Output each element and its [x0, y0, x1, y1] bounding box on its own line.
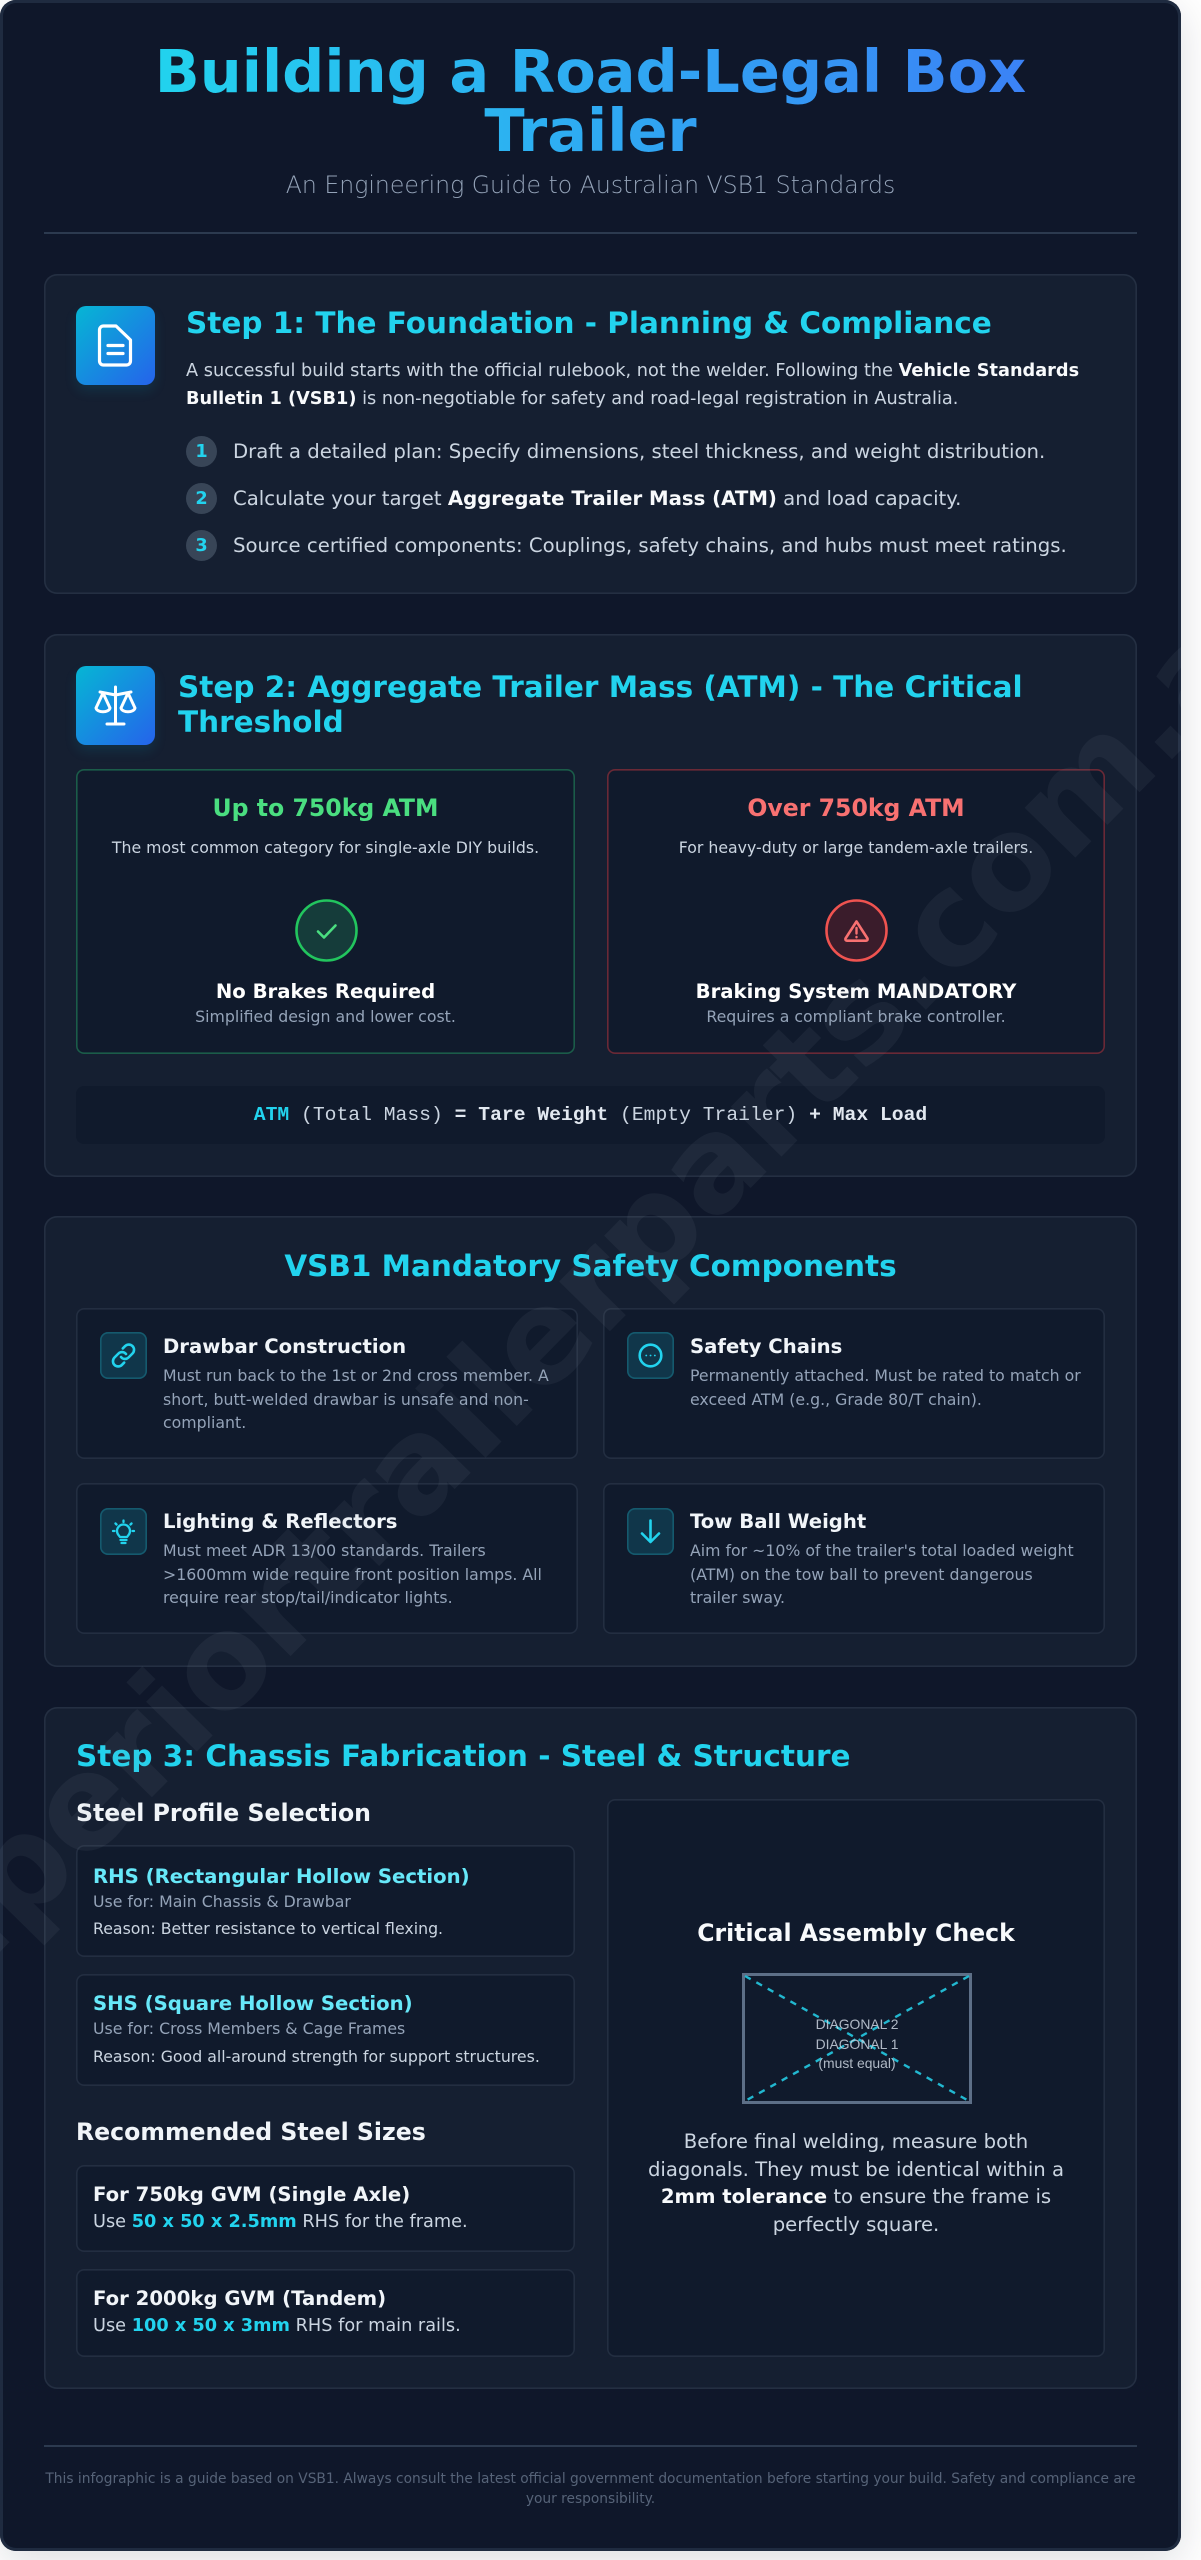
profile name: RHS (Rectangular Hollow Section) — [93, 1865, 470, 1888]
check text: Before final welding, measure both — [684, 2130, 1028, 2153]
heading: step 1: Step 1: The Foundation - Planning & Compliance — [186, 306, 992, 340]
profile use: Use for: Main Chassis & Drawbar — [93, 1892, 351, 1911]
check text: perfectly square. — [773, 2212, 939, 2236]
item 2: 2 — [195, 489, 208, 509]
footer note: This infographic is a guide based on VSB1. Always consult the latest official government documentation before starting your build. Safety and compliance are — [45, 2471, 1136, 2487]
card heading: Up to 750kg ATM — [212, 794, 438, 822]
card: SHS — [76, 1974, 575, 2086]
card: lighting and reflectors — [76, 1483, 578, 1634]
result note: Requires a compliant brake controller. — [706, 1007, 1006, 1026]
card: tow ball weight — [603, 1483, 1105, 1634]
card: safety chains — [603, 1308, 1105, 1459]
icon: chain link — [100, 1332, 147, 1379]
card text: require rear stop/tail/indicator lights. — [163, 1588, 453, 1607]
icon: check — [295, 899, 358, 962]
size text: Use 100 x 50 x 3mm RHS for main rails. — [93, 2316, 461, 2336]
card text: Must run back to the 1st or 2nd cross member. A — [163, 1366, 549, 1385]
item 2 — [186, 483, 961, 514]
subtitle: An Engineering Guide to Australian VSB1 Standards — [286, 171, 895, 199]
card title: Lighting & Reflectors — [163, 1510, 397, 1533]
card text: exceed ATM (e.g., Grade 80/T chain). — [690, 1390, 982, 1409]
panel: step 3 chassis fabrication — [44, 1707, 1137, 2389]
card text: >1600mm wide require front position lamps. All — [163, 1565, 542, 1584]
card description: The most common category for single-axle DIY builds. — [112, 838, 539, 857]
card text: short, butt-welded drawbar is unsafe and non- — [163, 1390, 529, 1409]
card: RHS — [76, 1845, 575, 1957]
item 3: 3 — [195, 536, 208, 556]
intro text: Bulletin 1 (VSB1) is non-negotiable for safety and road-legal registration in Australia. — [186, 388, 958, 408]
ATM formula: ATM (Total Mass) = Tare Weight (Empty Trailer) + Max Load — [254, 1104, 927, 1126]
result note: Simplified design and lower cost. — [195, 1007, 456, 1026]
panel: step 2 ATM threshold — [44, 634, 1137, 1177]
ATM formula — [76, 1086, 1105, 1144]
card: 750kg size — [76, 2165, 575, 2252]
icon: warning — [825, 899, 888, 962]
item 1: 1 — [195, 442, 208, 462]
intro text — [186, 361, 1079, 408]
profile reason: Reason: Good all-around strength for support structures. — [93, 2047, 540, 2066]
profile use: Use for: Cross Members & Cage Frames — [93, 2019, 405, 2038]
item 1: Draft a detailed plan: Specify dimensions, steel thickness, and weight distribution. — [233, 440, 1045, 463]
panel: step 1 planning and compliance — [44, 274, 1137, 594]
card text — [690, 1541, 1074, 1607]
card: over 750kg — [607, 769, 1105, 1054]
heading: step 2 — [178, 670, 1023, 739]
card text: Permanently attached. Must be rated to match or — [690, 1366, 1081, 1385]
card: drawbar construction — [76, 1308, 578, 1459]
card title: Drawbar Construction — [163, 1335, 406, 1358]
heading: safety components: VSB1 Mandatory Safety Components — [284, 1249, 897, 1283]
item 2: Calculate your target Aggregate Trailer Mass (ATM) and load capacity. — [233, 487, 961, 510]
item 3: Source certified components: Couplings, safety chains, and hubs must meet ratings. — [233, 534, 1067, 557]
title: Building a Road-Legal Box — [155, 37, 1026, 106]
heading: recommended steel sizes: Recommended Steel Sizes — [76, 2118, 426, 2146]
panel: mandatory safety components — [44, 1216, 1137, 1667]
card description: For heavy-duty or large tandem-axle trailers. — [679, 838, 1033, 857]
diagram: frame diagonals: DIAGONAL 2 — [816, 2016, 899, 2032]
check text — [648, 2130, 1064, 2236]
panel: critical assembly check — [607, 1799, 1105, 2357]
card title: Tow Ball Weight — [690, 1510, 866, 1533]
icon: light bulb — [100, 1508, 147, 1555]
heading: step 2: Threshold — [178, 705, 344, 739]
size title: For 2000kg GVM (Tandem) — [93, 2287, 386, 2310]
icon: document — [76, 306, 155, 385]
card text — [163, 1541, 542, 1607]
footer note — [45, 2471, 1136, 2507]
icon: chain circle — [627, 1332, 674, 1379]
profile reason: Reason: Better resistance to vertical flexing. — [93, 1919, 443, 1938]
card title: Safety Chains — [690, 1335, 842, 1358]
card text — [163, 1366, 549, 1432]
card heading: Over 750kg ATM — [747, 794, 965, 822]
diagram: frame diagonals: DIAGONAL 1 — [816, 2036, 899, 2052]
icon: down arrow — [627, 1508, 674, 1555]
check text: diagonals. They must be identical within a — [648, 2158, 1064, 2180]
size title: For 750kg GVM (Single Axle) — [93, 2183, 410, 2206]
card text: (ATM) on the tow ball to prevent dangerous — [690, 1565, 1033, 1584]
card: up to 750kg — [76, 769, 575, 1054]
heading: step 3: Step 3: Chassis Fabrication - Steel & Structure — [76, 1739, 851, 1773]
checklist — [186, 436, 1067, 561]
card: 2000kg size — [76, 2269, 575, 2357]
footer divider — [44, 2445, 1137, 2447]
intro text: A successful build starts with the official rulebook, not the welder. Following the Vehicle Standards — [186, 361, 1079, 381]
card text: compliant. — [163, 1413, 246, 1432]
footer note: your responsibility. — [526, 2491, 655, 2507]
heading: step 2: Step 2: Aggregate Trailer Mass (ATM) - The Critical — [178, 670, 1023, 704]
icon: scales — [76, 666, 155, 745]
heading: steel profile selection: Steel Profile Selection — [76, 1799, 371, 1827]
title: Trailer — [484, 96, 697, 165]
check text: 2mm tolerance to ensure the frame is — [661, 2185, 1051, 2208]
title — [0, 42, 1181, 160]
card text: trailer sway. — [690, 1588, 785, 1607]
card text — [690, 1366, 1081, 1409]
diagram: frame diagonals: (must equal) — [818, 2055, 896, 2071]
size text: Use 50 x 50 x 2.5mm RHS for the frame. — [93, 2212, 468, 2232]
header divider — [44, 232, 1137, 234]
card text: Aim for ~10% of the trailer's total loaded weight — [690, 1541, 1074, 1560]
profile name: SHS (Square Hollow Section) — [93, 1992, 413, 2015]
card text: Must meet ADR 13/00 standards. Trailers — [163, 1541, 486, 1560]
diagram: frame diagonals — [742, 1973, 972, 2104]
result title: No Brakes Required — [216, 980, 435, 1003]
result title: Braking System MANDATORY — [696, 980, 1016, 1003]
check heading: Critical Assembly Check — [697, 1919, 1015, 1947]
